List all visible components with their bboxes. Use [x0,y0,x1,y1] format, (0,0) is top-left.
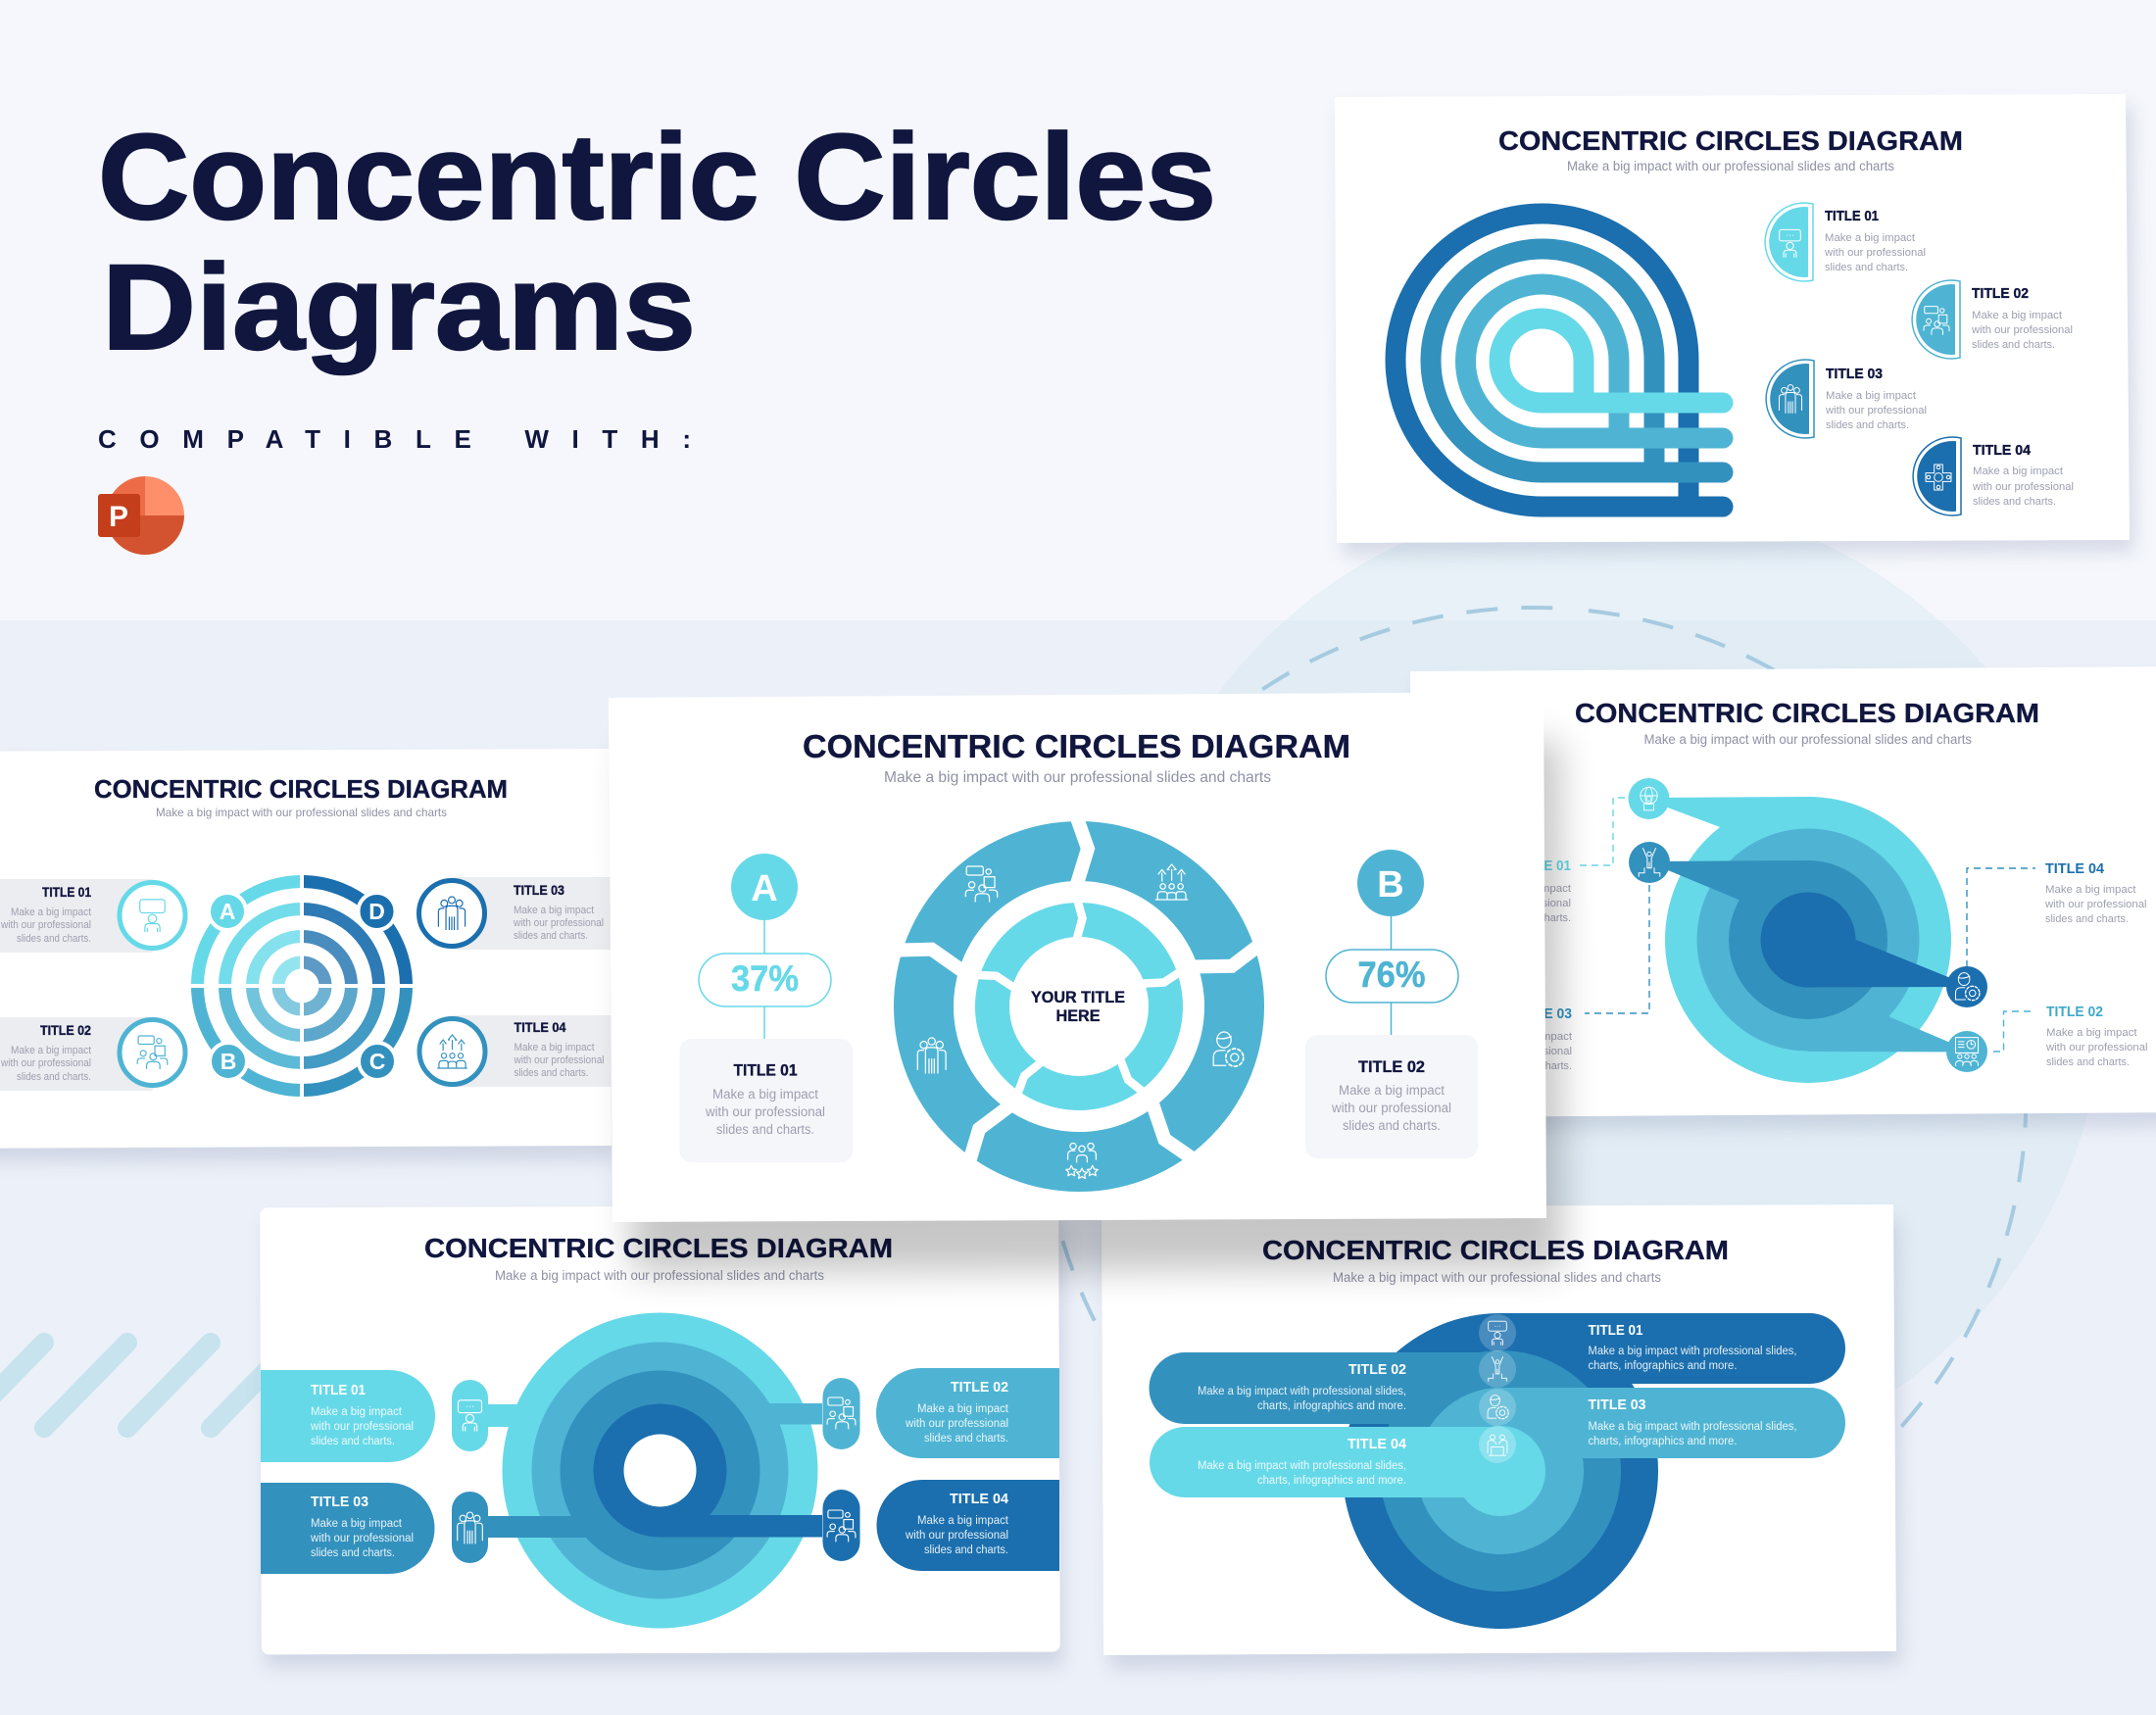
text: title 03 [310,1494,414,1559]
icon 2 [1479,1350,1516,1388]
column A [680,854,853,1162]
pill 37%: 37% [731,958,799,999]
icon: star team [1066,1143,1098,1178]
column B [1305,850,1478,1158]
icon pill 02 [823,1378,860,1449]
card title 02: with our professional [1331,1101,1451,1115]
card title 02 [1305,1035,1478,1158]
center title [1031,988,1125,1025]
main title [98,110,1216,375]
pill 76% [1326,950,1458,1003]
item title 01: with our professional [1824,247,1926,259]
item title 04 [1913,437,2074,515]
text: title 02: slides and charts. [2046,1056,2130,1068]
main title: Diagrams [102,240,696,375]
heading: CONCENTRIC CIRCLES DIAGRAM [424,1233,893,1263]
text: title 02: with our professional [2045,1042,2148,1054]
text: title 04 [1198,1436,1407,1487]
heading: CONCENTRIC CIRCLES DIAGRAM [803,729,1350,765]
center title: HERE [1056,1006,1100,1025]
heading: CONCENTRIC CIRCLES DIAGRAM [1262,1235,1729,1265]
panel: slide right, circles with tails [1410,666,2156,1130]
item title 03: TITLE 03 [1826,367,1883,382]
text: title 03: TITLE 03 [1588,1396,1646,1413]
icon 4 [1479,1426,1516,1463]
card title 01: with our professional [705,1104,825,1119]
text: title 01: with our professional [0,919,91,931]
card title 02: slides and charts. [1343,1118,1441,1133]
text: title 04: Make a big impact [2045,884,2136,896]
text: title 02: TITLE 02 [1348,1361,1406,1378]
panel: slide top right, arches [1335,94,2134,556]
text: title 03: charts, infographics and more. [1588,1436,1737,1447]
item title 01: TITLE 01 [1825,209,1879,224]
icon circle 01 [120,882,185,949]
icon: raised arms [1629,842,1670,883]
label shape: title 02 [876,1368,1059,1458]
text: title 01: charts, infographics and more. [1588,1360,1737,1372]
icon: globe [1629,778,1670,819]
text: title 02: slides and charts. [924,1433,1008,1445]
heading: CONCENTRIC CIRCLES DIAGRAM [94,774,508,804]
text: title 04: slides and charts. [514,1067,588,1079]
icon pill 04 [823,1490,860,1561]
item title 04: with our professional [1972,481,2074,493]
text: title 04: slides and charts. [2045,913,2129,925]
text: title 01: with our professional [310,1421,414,1433]
badge A: A [751,868,778,909]
panel: slide left, quadrant rings [0,749,617,1162]
subtitle: Make a big impact with our professional slides and charts [1644,732,1972,747]
item title 04: Make a big impact [1973,466,2063,477]
marker D: D [368,899,385,924]
marker D [359,893,396,930]
background circle [1120,496,2104,1480]
text: title 03 [513,882,604,942]
text: title 03 [1588,1396,1797,1447]
text: title 03: Make a big impact with professional slides, [1588,1421,1797,1433]
icon 3 [1479,1389,1516,1426]
text: title 01: TITLE 01 [1516,858,1571,874]
background: upper area [0,0,2156,620]
subtitle: Make a big impact with our professional slides and charts [1567,159,1894,173]
heading: CONCENTRIC CIRCLES DIAGRAM [1498,125,1963,156]
item title 04: TITLE 04 [1973,443,2031,459]
text: title 01 [1468,858,1571,924]
text: title 01: TITLE 01 [42,884,91,900]
card title 01: TITLE 01 [733,1060,798,1080]
text: title 01: slides and charts. [1488,912,1571,924]
icon: gear person [1213,1032,1244,1066]
badge A [731,854,798,920]
main title: Concentric Circles [98,110,1216,245]
text: title 01: TITLE 01 [311,1382,366,1398]
concentric chart with tails [1648,797,1967,1083]
icon: PowerPoint logo [98,476,184,555]
panel: slide bottom left, circles with pills [260,1205,1063,1667]
pill 76%: 76% [1358,955,1425,995]
text: title 04 [2044,860,2146,925]
icon pill 03 [452,1492,488,1563]
text: title 02: Make a big impact [917,1403,1009,1415]
subtitle: Make a big impact with our professional slides and charts [1333,1270,1661,1285]
text: title 01 [310,1382,414,1447]
icon: gear person [1946,966,1987,1007]
text: title 03: with our professional [310,1533,414,1544]
card title 01: Make a big impact [712,1087,818,1102]
text: title 04 [514,1019,604,1079]
text: title 04: TITLE 04 [514,1019,566,1035]
concentric chart [488,1313,822,1629]
panel: slide bottom right, stacked bands [1102,1204,1901,1669]
text: title 04: Make a big impact [917,1515,1009,1527]
text: title 03: TITLE 03 [514,882,564,898]
item title 04: slides and charts. [1973,496,2056,508]
text: title 02 [905,1379,1009,1445]
panel: slide center, wheel [609,692,1546,1222]
text: title 01: Make a big impact with professional slides, [1588,1346,1797,1357]
label shape: title 03 [261,1483,435,1574]
icon circle 03 [419,880,484,947]
text: title 01: slides and charts. [311,1436,395,1447]
icon: chart board [1946,1031,1987,1072]
text: title 04: charts, infographics and more. [1257,1475,1406,1487]
text: title 02 [2045,1004,2148,1068]
text: title 02: Make a big impact [11,1045,91,1056]
text: title 04: TITLE 04 [2045,860,2105,877]
marker B [210,1043,247,1080]
pill 37% [699,954,831,1006]
band: title 04 [452,1015,612,1087]
marker A: A [220,899,235,924]
concentric chart with bands [1149,1313,1845,1629]
compatible with label: COMPATIBLE WITH: [98,424,691,454]
text: title 01: slides and charts. [17,933,91,945]
subtitle: Make a big impact with our professional slides and charts [156,806,447,819]
badge B: B [1377,864,1404,906]
card title 01 [680,1039,853,1162]
label shape: title 01 [261,1370,435,1462]
text: title 02: Make a big impact [2046,1027,2137,1039]
band: title 03 [452,877,612,950]
item title 02: slides and charts. [1972,339,2055,351]
icon circle 02 [120,1019,185,1086]
text: title 04: with our professional [514,1054,604,1066]
item title 02: TITLE 02 [1972,286,2029,302]
item title 02: with our professional [1971,324,2073,336]
text: title 01: with our professional [1468,898,1571,909]
item title 01: slides and charts. [1825,262,1908,273]
text: title 02: TITLE 02 [2046,1004,2103,1020]
text: title 02: TITLE 02 [951,1379,1008,1396]
arch chart [1396,214,1723,507]
diagonal bars [0,1343,294,1428]
text: title 04: TITLE 04 [1348,1436,1407,1452]
quadrant ring chart [186,870,417,1102]
text: title 01 [1588,1322,1797,1372]
icon: arrows up [1155,864,1188,900]
wheel chart [896,814,1264,1167]
band: title 01 [0,879,153,953]
subtitle: Make a big impact with our professional slides and charts [884,769,1271,786]
item title 02: Make a big impact [1972,310,2062,321]
text: title 04: TITLE 04 [950,1491,1009,1507]
icon: team [917,1038,946,1073]
band: title 02 [0,1017,153,1091]
marker C: C [369,1049,385,1074]
text: title 02: with our professional [0,1057,91,1069]
text: title 02: slides and charts. [17,1071,91,1083]
item title 01: Make a big impact [1825,232,1915,244]
text: title 03 [1469,1005,1572,1072]
icon pill 01 [452,1380,488,1451]
text: title 03: Make a big impact [1481,1031,1572,1043]
subtitle: Make a big impact with our professional slides and charts [495,1268,824,1283]
icon: meeting [965,866,998,902]
icon 1 [1479,1314,1516,1351]
card title 02: Make a big impact [1339,1083,1445,1098]
badge B [1357,850,1424,916]
text: title 02: Make a big impact with professional slides, [1198,1386,1406,1397]
text: title 03: slides and charts. [311,1547,395,1559]
marker A [209,893,246,930]
center title: YOUR TITLE [1031,988,1125,1006]
text: title 02: TITLE 02 [40,1022,91,1038]
text: title 02: charts, infographics and more. [1257,1400,1406,1412]
text: title 01: Make a big impact [11,906,91,918]
marker C [359,1043,396,1080]
dashed ring [1042,608,2026,1592]
text: title 01: Make a big impact [311,1406,403,1418]
item title 03 [1766,360,1927,438]
text: title 04: Make a big impact with professional slides, [1198,1460,1406,1472]
text: title 02 [0,1022,91,1083]
text: title 03: slides and charts. [514,930,588,942]
card title 01: slides and charts. [716,1122,814,1137]
text: title 04: slides and charts. [924,1544,1008,1556]
text: title 03: slides and charts. [1489,1060,1572,1072]
heading: CONCENTRIC CIRCLES DIAGRAM [1575,698,2039,728]
item title 03: Make a big impact [1826,390,1916,402]
text: title 02: with our professional [905,1418,1008,1430]
text: title 03: Make a big impact [514,905,594,916]
icon circle 04 [419,1019,485,1084]
item title 01 [1765,203,1926,281]
text: title 03: with our professional [1469,1046,1572,1057]
item title 03: slides and charts. [1826,419,1909,431]
text: title 03: with our professional [513,917,604,929]
text: title 03: TITLE 03 [1515,1005,1572,1022]
text: title 01: Make a big impact [1480,883,1571,895]
item title 03: with our professional [1825,405,1927,416]
connector lines [1580,798,2035,1052]
text: title 04 [905,1491,1009,1556]
text: title 04: with our professional [905,1530,1008,1542]
marker B: B [220,1049,236,1074]
text: title 03: Make a big impact [311,1518,403,1530]
text: title 04: with our professional [2044,899,2146,910]
icon: PowerPoint logo: P [109,501,128,533]
text: title 04: Make a big impact [514,1042,594,1054]
text: title 03: TITLE 03 [311,1494,368,1510]
text: title 01: TITLE 01 [1588,1322,1642,1339]
card title 02: TITLE 02 [1358,1057,1425,1076]
text: title 02 [1198,1361,1406,1412]
background: lower band [0,620,2156,1715]
item title 02 [1912,280,2073,359]
text: title 01 [0,884,91,945]
label shape: title 04 [876,1480,1059,1571]
